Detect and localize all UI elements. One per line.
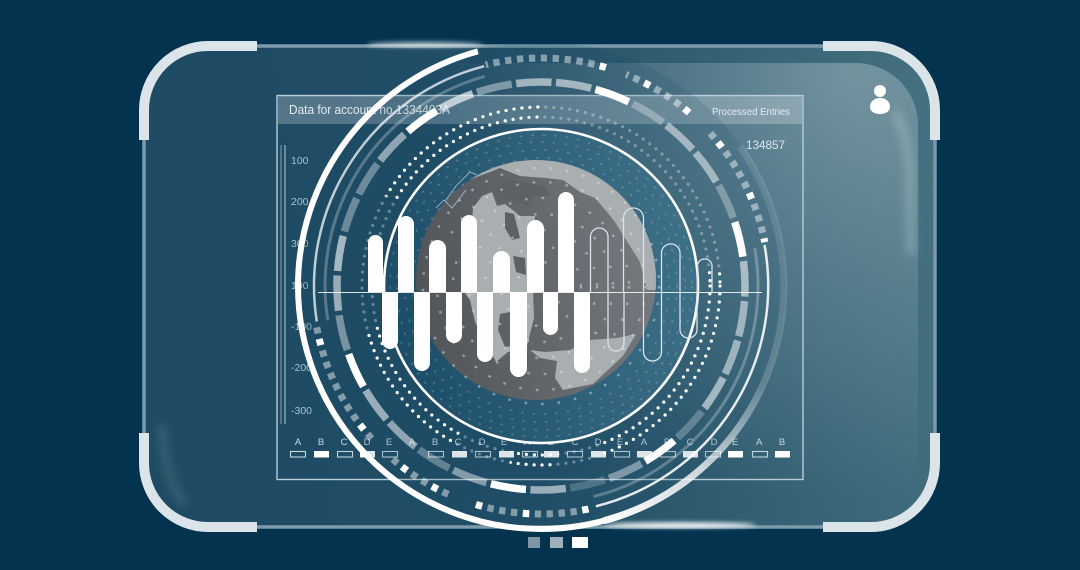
- corner bracket top left: [144, 46, 257, 140]
- x axis letters: E: [732, 437, 738, 448]
- x axis letters: D: [364, 437, 371, 448]
- x axis letters: B: [318, 437, 324, 448]
- globe dark continents: [495, 178, 550, 347]
- x axis letters: A: [641, 437, 648, 448]
- globe dots: [390, 135, 692, 437]
- x axis letters: E: [501, 437, 507, 448]
- glare top: [367, 42, 483, 47]
- x axis filled boxes: [314, 451, 790, 458]
- square tick ring: [313, 58, 769, 514]
- inner disc: [384, 129, 698, 443]
- x axis letters: B: [432, 437, 438, 448]
- x axis outlined boxes: [290, 452, 768, 457]
- x axis letters: A: [524, 437, 531, 448]
- x axis letters: C: [341, 437, 348, 448]
- y axis labels: -100: [291, 321, 312, 333]
- globe base: [416, 160, 656, 400]
- x axis letters: C: [687, 437, 694, 448]
- x axis letters: E: [617, 437, 623, 448]
- solid bars down: [382, 292, 590, 377]
- device frame: [144, 42, 935, 528]
- corner bracket bottom right: [823, 433, 935, 527]
- corner bracket bottom left: [144, 433, 257, 527]
- x axis letters: A: [409, 437, 416, 448]
- outlined bars down: [607, 292, 698, 362]
- outer dim dot rings: [390, 135, 692, 437]
- dim dotted rings: [362, 107, 720, 465]
- inner glass highlight: [160, 63, 918, 511]
- x axis letters: C: [455, 437, 462, 448]
- icon: user: [870, 85, 890, 114]
- x axis letters: E: [386, 437, 392, 448]
- x axis letters: D: [711, 437, 718, 448]
- x axis letters: [295, 437, 785, 448]
- x axis letters: D: [595, 437, 602, 448]
- frame glass body: [144, 46, 935, 527]
- processed entries number: 134857: [746, 138, 785, 152]
- x axis letters: C: [572, 437, 579, 448]
- baseline: [318, 292, 762, 294]
- reflection right: [895, 112, 911, 255]
- y axis labels: 300: [291, 238, 309, 250]
- reflection left: [162, 425, 185, 505]
- y axis labels: 100: [291, 280, 309, 292]
- globe: [416, 160, 656, 400]
- x axis letters: B: [664, 437, 670, 448]
- solid bars up: [368, 192, 574, 292]
- segmented ring: [337, 82, 745, 490]
- x axis letters: D: [479, 437, 486, 448]
- outer white arc: [298, 43, 784, 529]
- y axis labels: -300: [291, 405, 312, 417]
- y axis labels: 100: [291, 155, 309, 167]
- thin frame border: [144, 46, 935, 527]
- globe land masses: [464, 160, 656, 390]
- y axis labels: -200: [291, 362, 312, 374]
- outlined bars up: [590, 207, 713, 292]
- bar chart: [318, 192, 762, 377]
- x axis letters: A: [756, 437, 763, 448]
- outer fading arc: [604, 147, 784, 521]
- panel header band: [278, 96, 802, 124]
- ring band shade: [297, 42, 785, 530]
- hud rings: [297, 42, 785, 530]
- bright dotted rings: [362, 107, 720, 465]
- y axis lines: [281, 145, 285, 424]
- x axis letters: A: [295, 437, 302, 448]
- x axis letters: B: [548, 437, 554, 448]
- heading: account: Data for account no.1334403A: [289, 103, 451, 117]
- infographic canvas: [139, 38, 940, 548]
- y axis labels: 200: [291, 196, 309, 208]
- pagination squares: [528, 537, 588, 548]
- glare bottom: [604, 522, 756, 528]
- dashed scribble lines: [436, 172, 477, 208]
- panel outline: [277, 96, 803, 480]
- y axis labels: [291, 155, 312, 417]
- panel: account data: [277, 96, 803, 480]
- heading: processed entries: Processed Entries: [712, 107, 790, 118]
- corner bracket top right: [823, 46, 935, 140]
- dim ring arcs: [325, 76, 758, 497]
- x axis letters: B: [779, 437, 785, 448]
- thin ring arcs: [314, 66, 768, 506]
- globe dot rings: [423, 168, 659, 404]
